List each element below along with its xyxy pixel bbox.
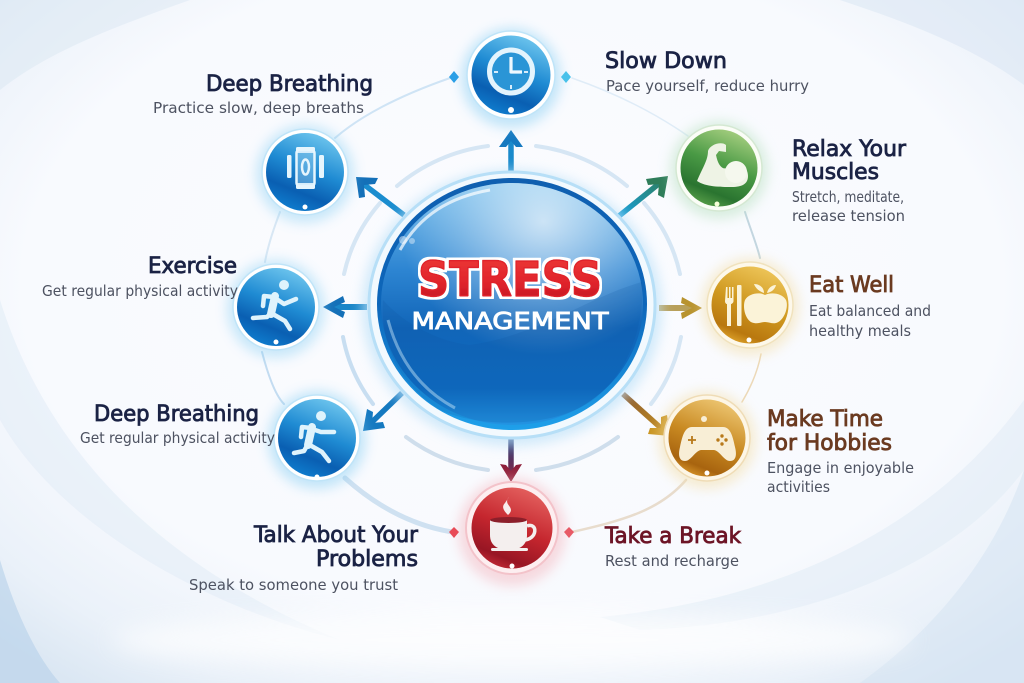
central hub [362,170,662,446]
hub title [412,252,609,335]
node: eat well [701,258,799,356]
arrow: to eat well [659,297,702,319]
label: slow down [605,49,809,95]
label: talk about your problems [189,523,419,594]
inner ring segments [343,146,681,470]
label: make time for hobbies [767,407,914,496]
label: slow down: Pace yourself, reduce hurry [606,77,809,95]
node: deep breathing icon [256,125,354,223]
label: exercise [42,254,238,300]
label: eat well: healthy meals [809,322,911,340]
hub title: STRESS [418,252,602,308]
arrow: to exercise [323,296,367,318]
node: relax muscles [670,121,768,219]
label: relax your muscles: Stretch, meditate, [792,188,904,206]
outer connecting ring [262,78,761,532]
arrow: to hobbies [623,394,670,436]
label: deep breathing lower: Get regular physical activity [80,429,275,447]
label: eat well [809,273,931,340]
label: take a break [604,524,741,570]
label: deep breathing top [153,72,373,117]
node: exercise [227,260,325,358]
node: slow down clock [449,28,571,128]
arrow: to relax your muscles [619,176,668,216]
node: deep breathing lower [268,391,366,489]
label: take a break: Take a Break [604,524,741,549]
arrow: to deep breathing top [356,177,404,215]
label: make time for hobbies: activities [767,478,830,496]
label: slow down: Slow Down [605,49,727,74]
arrow: to slow down [499,130,523,175]
label: relax your muscles: Muscles [792,160,879,185]
label: talk about your problems: Problems [316,547,418,572]
label: talk about your problems: Speak to someone you trust [189,576,398,594]
label: make time for hobbies: for Hobbies [767,431,892,456]
label: relax your muscles: Relax Your [792,137,907,162]
arrow: to take a break [500,428,522,482]
node: take a break [449,478,574,586]
node: hobbies [658,391,756,489]
label: exercise: Exercise [148,254,237,279]
label: take a break: Rest and recharge [605,552,739,570]
label: relax your muscles [792,137,907,225]
label: deep breathing top: Deep Breathing [206,72,373,97]
label: deep breathing top: Practice slow, deep breaths [153,99,364,117]
label: exercise: Get regular physical activity [42,282,238,300]
label: make time for hobbies: Engage in enjoyable [767,459,914,477]
label: eat well: Eat balanced and [809,302,931,320]
label: make time for hobbies: Make Time [767,407,883,432]
arrow: to deep breathing lower [363,393,402,431]
label: deep breathing lower [80,402,275,447]
label: relax your muscles: release tension [792,207,905,225]
label: eat well: Eat Well [809,273,894,298]
label: talk about your problems: Talk About Your [253,523,419,548]
hub title: MANAGEMENT [412,307,609,335]
label: deep breathing lower: Deep Breathing [94,402,259,427]
